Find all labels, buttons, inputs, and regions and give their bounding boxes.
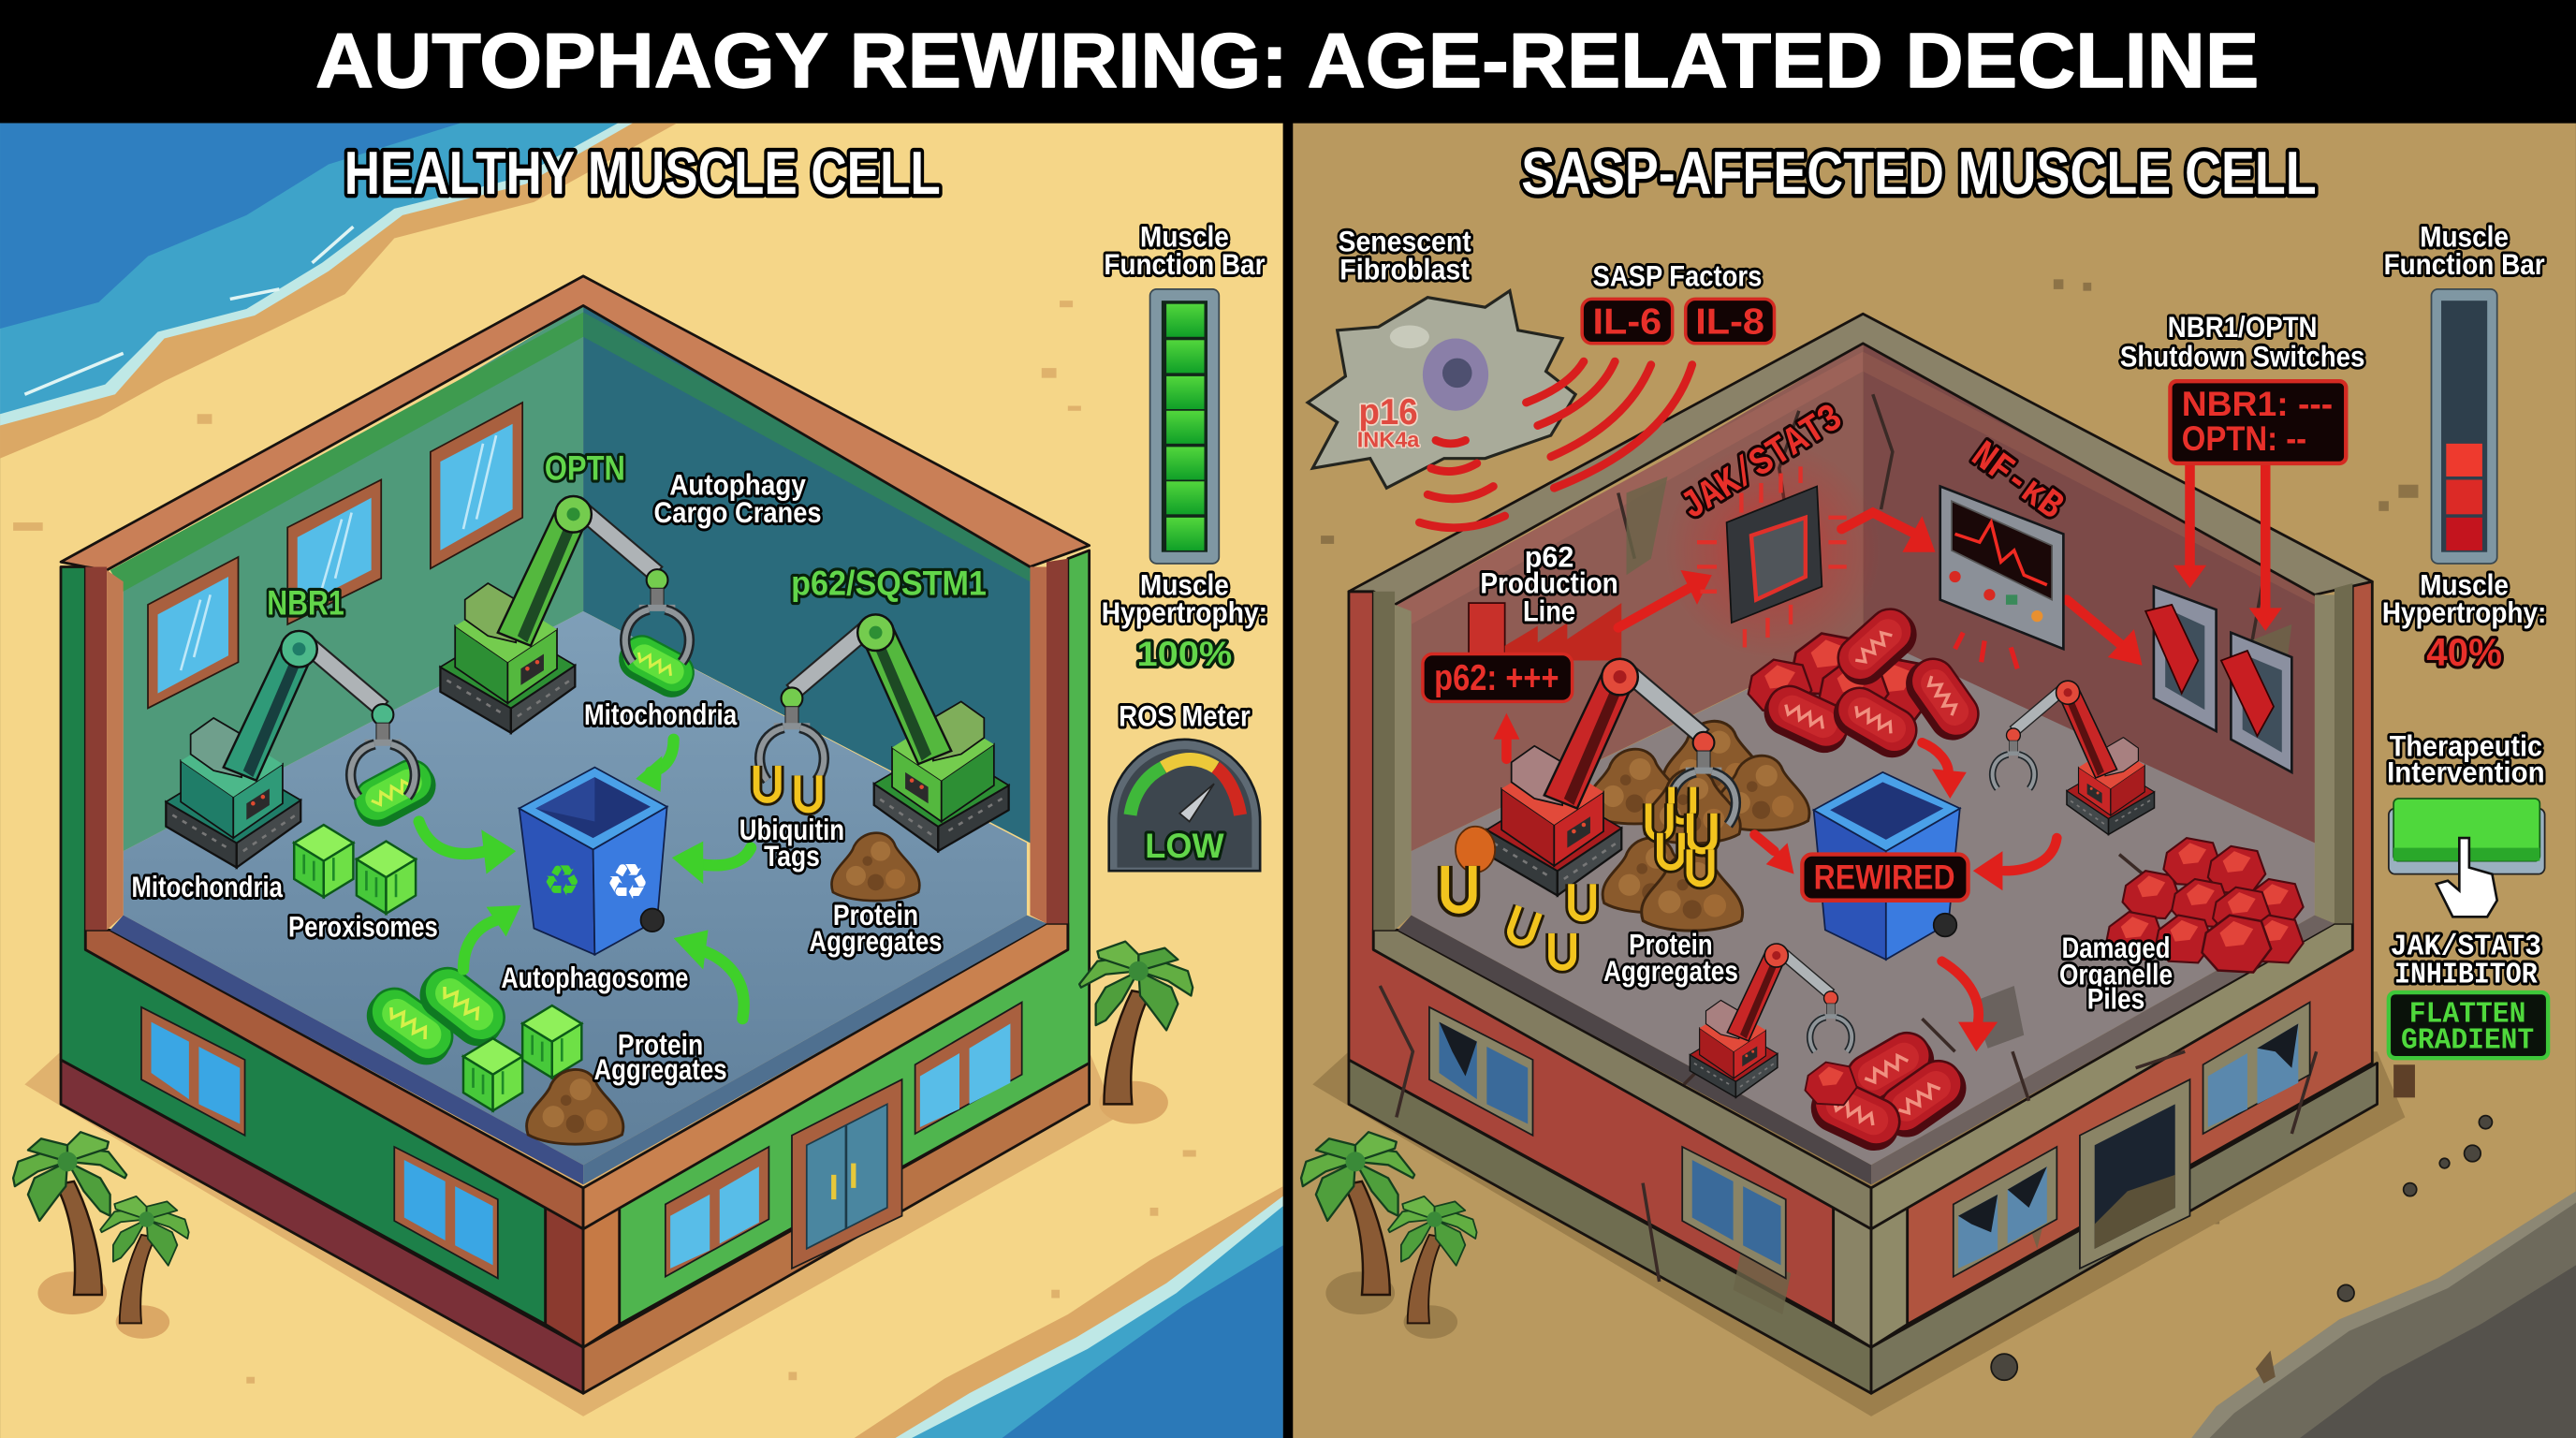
label: JAK/STAT3: JAK/STAT3 bbox=[1674, 396, 1851, 530]
polluted sea bottom-right bbox=[2191, 1191, 2576, 1438]
label: panel heading healthy: HEALTHY MUSCLE CELL bbox=[344, 139, 941, 207]
JAK/STAT3 inhibitor bbox=[2389, 932, 2548, 1058]
label: floor items: Peroxisomes bbox=[288, 909, 438, 943]
label: panel heading SASP: SASP-AFFECTED MUSCLE CELL bbox=[1521, 139, 2317, 207]
label: floor items: Ubiquitin bbox=[739, 813, 844, 846]
peroxisomes bbox=[294, 825, 581, 1110]
crane: small red right bbox=[1993, 681, 2155, 834]
ubiquitin tags bbox=[1445, 787, 1714, 968]
crane: p62 bbox=[760, 614, 1009, 851]
SASP factors callout: SASP Factors bbox=[1593, 258, 1762, 292]
SASP factors callout bbox=[1582, 258, 1774, 344]
muscle function bar: damaged: Function Bar bbox=[2384, 247, 2545, 281]
SASP factors callout: IL-6 bbox=[1593, 301, 1661, 342]
label: floor items: Aggregates bbox=[1603, 954, 1738, 988]
JAK/STAT3 inhibitor: FLATTEN bbox=[2409, 999, 2525, 1032]
sand specks bbox=[13, 301, 1196, 1384]
NBR1/OPTN shutdown callout: OPTN: -- bbox=[2182, 419, 2306, 458]
crane: small red bottom bbox=[1690, 944, 1852, 1097]
SASP factors callout: IL-8 bbox=[1695, 301, 1764, 342]
therapeutic intervention button: Therapeutic bbox=[2390, 728, 2542, 762]
shutdown switches bbox=[2145, 587, 2291, 772]
muscle function bar: healthy bbox=[1104, 219, 1265, 564]
muscle hypertrophy: 100%: Muscle bbox=[1140, 567, 1229, 601]
rocks bbox=[1991, 1116, 2492, 1380]
beach sea top-left bbox=[0, 124, 677, 459]
label: floor items: Tags bbox=[764, 839, 820, 873]
rewired badge: REWIRED bbox=[1814, 858, 1955, 896]
p62 +++ badge: p62: +++ bbox=[1434, 658, 1559, 698]
NBR1/OPTN shutdown callout: Shutdown Switches bbox=[2120, 339, 2364, 373]
JAK/STAT3 chip bbox=[1697, 466, 1847, 647]
label: NF-kB: NF-κB bbox=[1963, 433, 2071, 529]
JAK/STAT3 inhibitor: INHIBITOR bbox=[2394, 960, 2538, 992]
therapeutic intervention button bbox=[2387, 728, 2545, 917]
label: floor items: Protein bbox=[833, 898, 918, 932]
windows: back walls bbox=[148, 403, 522, 708]
muscle hypertrophy: 100% bbox=[1102, 567, 1267, 673]
muscle hypertrophy: 40% bbox=[2382, 567, 2546, 674]
mitochondria held by cranes bbox=[346, 628, 701, 834]
p62 production line label bbox=[1480, 539, 1618, 627]
muscle function bar: healthy: Function Bar bbox=[1104, 247, 1265, 281]
crane: big red bbox=[1486, 659, 1735, 895]
SASP signal waves bbox=[1419, 361, 1692, 528]
label: floor items: Piles bbox=[2087, 982, 2144, 1016]
damaged mitochondria piles bbox=[1749, 599, 1988, 1159]
NBR1/OPTN shutdown callout bbox=[2120, 310, 2364, 463]
muscle hypertrophy: 40%: Muscle bbox=[2420, 567, 2509, 601]
hand cursor bbox=[2437, 838, 2497, 917]
label: autophagy cargo cranes bbox=[654, 467, 822, 529]
label: floor items bbox=[1603, 928, 2173, 1016]
label: protein names: NBR1 bbox=[267, 583, 344, 622]
muscle hypertrophy: 40%: 40% bbox=[2426, 630, 2502, 674]
p62 production line label: Line bbox=[1523, 594, 1575, 627]
label: floor items: Aggregates bbox=[594, 1052, 727, 1086]
label: floor items: Protein bbox=[1629, 928, 1713, 961]
autophagosome bin rewired bbox=[1802, 772, 1969, 960]
protein aggregates central pile bbox=[1587, 721, 1809, 931]
red pathway arrows bbox=[1493, 463, 2282, 1051]
label: protein names: p62/SQSTM1 bbox=[791, 564, 987, 602]
crane: OPTN bbox=[440, 496, 689, 733]
autophagosome bin bbox=[520, 768, 667, 955]
label: floor items: Protein bbox=[618, 1028, 703, 1062]
label: floor items: Mitochondria bbox=[131, 870, 283, 903]
palm trees bbox=[1301, 1064, 2415, 1339]
autophagosome bin: ♻ bbox=[606, 854, 650, 911]
crane: NBR1 bbox=[166, 631, 415, 868]
NBR1/OPTN shutdown callout: NBR1/OPTN bbox=[2168, 310, 2318, 344]
label: floor items bbox=[131, 697, 943, 1086]
label: protein names bbox=[267, 448, 987, 622]
autophagosome bin: ♻ bbox=[543, 856, 581, 905]
label: floor items: Autophagosome bbox=[501, 961, 688, 994]
label: floor items: Mitochondria bbox=[584, 697, 738, 731]
panel: healthy muscle cell bbox=[0, 124, 1283, 1438]
NBR1/OPTN shutdown callout: NBR1: --- bbox=[2182, 385, 2333, 423]
JAK/STAT3 inhibitor: GRADIENT bbox=[2401, 1025, 2534, 1058]
JAK/STAT3 inhibitor: JAK/STAT3 bbox=[2391, 932, 2541, 964]
title bar bbox=[0, 0, 2576, 124]
beach sea bottom-right bbox=[855, 1186, 1283, 1438]
factory stack: p62 production line bbox=[1469, 603, 1621, 662]
cracks and stains bbox=[1380, 394, 2317, 1282]
ROS meter: LOW bbox=[1145, 827, 1224, 865]
ubiquitin tags bbox=[756, 766, 819, 810]
building: healthy cell bbox=[24, 276, 1117, 1416]
ROS meter: ROS Meter bbox=[1119, 699, 1251, 733]
p62 production line label: Production bbox=[1480, 566, 1618, 600]
muscle hypertrophy: 100%: Hypertrophy: bbox=[1102, 595, 1267, 629]
muscle hypertrophy: 100%: 100% bbox=[1137, 635, 1232, 673]
muscle function bar: healthy: Muscle bbox=[1140, 219, 1229, 253]
title: AUTOPHAGY REWIRING: AGE-RELATED DECLINE bbox=[315, 18, 2259, 104]
p16 INK4a: p16 bbox=[1358, 392, 1418, 433]
label: floor items: Organelle bbox=[2059, 957, 2173, 990]
therapeutic intervention button: Intervention bbox=[2387, 755, 2545, 788]
building: damaged cell bbox=[1312, 314, 2405, 1416]
windows and door: front walls bbox=[141, 1003, 1022, 1278]
windows broken bbox=[1429, 1003, 2310, 1278]
muscle function bar: damaged bbox=[2384, 219, 2545, 564]
NF-kB monitor bbox=[1940, 486, 2063, 668]
label: autophagy cargo cranes: Autophagy bbox=[669, 467, 806, 501]
red glow on wall bbox=[1664, 442, 1881, 659]
muscle hypertrophy: 40%: Hypertrophy: bbox=[2382, 595, 2546, 629]
label: floor items: Damaged bbox=[2062, 931, 2170, 964]
panel: SASP-affected muscle cell bbox=[1293, 124, 2576, 1438]
senescent fibroblast: INK4a bbox=[1357, 427, 1420, 451]
center divider bbox=[1283, 124, 1293, 1438]
ROS meter bbox=[1109, 699, 1260, 871]
senescent fibroblast bbox=[1308, 291, 1575, 488]
label: autophagy cargo cranes: Cargo Cranes bbox=[654, 495, 822, 529]
label: floor items: Aggregates bbox=[809, 924, 943, 958]
label: senescent fibroblast bbox=[1339, 225, 1471, 286]
green flow arrows bbox=[419, 740, 751, 1019]
sand debris bbox=[1321, 279, 2418, 1384]
damaged organelle pile bbox=[1805, 838, 2304, 1105]
p62 production line label: p62 bbox=[1525, 539, 1573, 573]
label: protein names: OPTN bbox=[545, 448, 625, 487]
protein aggregates piles bbox=[527, 833, 919, 1144]
label: senescent fibroblast: Senescent bbox=[1339, 225, 1471, 258]
muscle function bar: damaged: Muscle bbox=[2420, 219, 2509, 253]
mitochondria cluster bbox=[357, 958, 515, 1075]
palm trees bbox=[13, 942, 1193, 1339]
label: senescent fibroblast: Fibroblast bbox=[1339, 252, 1470, 286]
